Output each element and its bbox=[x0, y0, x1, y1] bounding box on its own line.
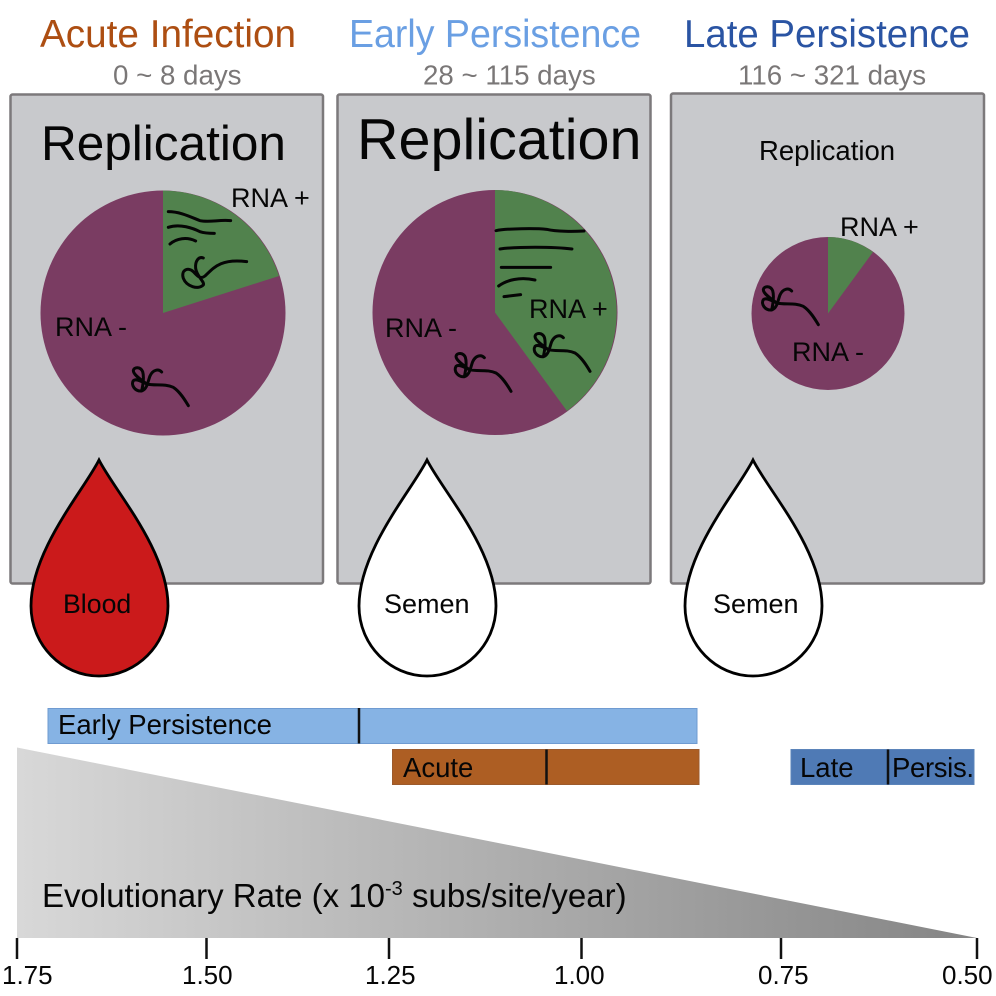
pie chart: late: RNA - bbox=[792, 337, 864, 367]
axis: evolutionary rate scale bbox=[2, 938, 993, 990]
icon: semen drop late: Semen bbox=[713, 589, 799, 619]
pie chart: early bbox=[372, 190, 618, 435]
axis label: Evolutionary Rate (x 10 bbox=[42, 877, 385, 914]
bar: late persistence range: Late bbox=[800, 752, 854, 783]
subtitle: late days: 116 ~ 321 days bbox=[738, 60, 926, 90]
heading: replication acute: Replication bbox=[41, 116, 286, 171]
heading: replication early: Replication bbox=[357, 108, 641, 172]
panel: acute infection bbox=[10, 94, 323, 584]
heading: replication late: Replication bbox=[759, 135, 895, 166]
subtitle: acute days: 0 ~ 8 days bbox=[113, 60, 242, 90]
axis: evolutionary rate scale: 1.25 bbox=[365, 960, 416, 990]
bar: late persistence range bbox=[791, 750, 974, 784]
pie chart: acute: RNA + bbox=[231, 183, 310, 213]
pie chart: late bbox=[752, 212, 919, 390]
chart: evolutionary rate wedge bbox=[17, 748, 977, 938]
axis: evolutionary rate scale: 0.75 bbox=[758, 960, 809, 990]
axis: evolutionary rate scale: 0.50 bbox=[942, 960, 993, 990]
bar: early persistence range bbox=[48, 708, 697, 744]
icon: blood drop bbox=[31, 460, 168, 676]
axis: evolutionary rate scale: 1.50 bbox=[182, 960, 233, 990]
pie chart: early: RNA - bbox=[385, 313, 457, 343]
bar: early persistence range: Early Persistence bbox=[58, 709, 272, 740]
pie chart: acute: RNA - bbox=[55, 312, 127, 342]
icon: semen drop late bbox=[685, 460, 822, 676]
axis label: -3 bbox=[385, 878, 403, 900]
title: Acute Infection: Acute Infection bbox=[40, 13, 296, 56]
bar: late persistence range: Persis. bbox=[892, 752, 974, 783]
axis: evolutionary rate scale: 1.75 bbox=[2, 960, 53, 990]
panel: early persistence bbox=[338, 94, 650, 584]
pie chart: late: RNA + bbox=[840, 212, 919, 242]
subtitle: early days: 28 ~ 115 days bbox=[423, 60, 596, 90]
pie chart: early: RNA + bbox=[529, 294, 608, 324]
icon: semen drop early bbox=[359, 460, 496, 676]
pie chart: acute bbox=[40, 183, 310, 436]
panel: late persistence bbox=[671, 94, 984, 584]
bar: acute range: Acute bbox=[403, 752, 473, 783]
title: Late Persistence: Late Persistence bbox=[684, 13, 970, 56]
axis: evolutionary rate scale: 1.00 bbox=[554, 960, 605, 990]
icon: blood drop: Blood bbox=[63, 589, 131, 619]
title: Early Persistence: Early Persistence bbox=[349, 13, 641, 56]
bar: acute range bbox=[392, 750, 699, 784]
axis label: subs/site/year) bbox=[403, 877, 627, 914]
icon: semen drop early: Semen bbox=[384, 589, 470, 619]
